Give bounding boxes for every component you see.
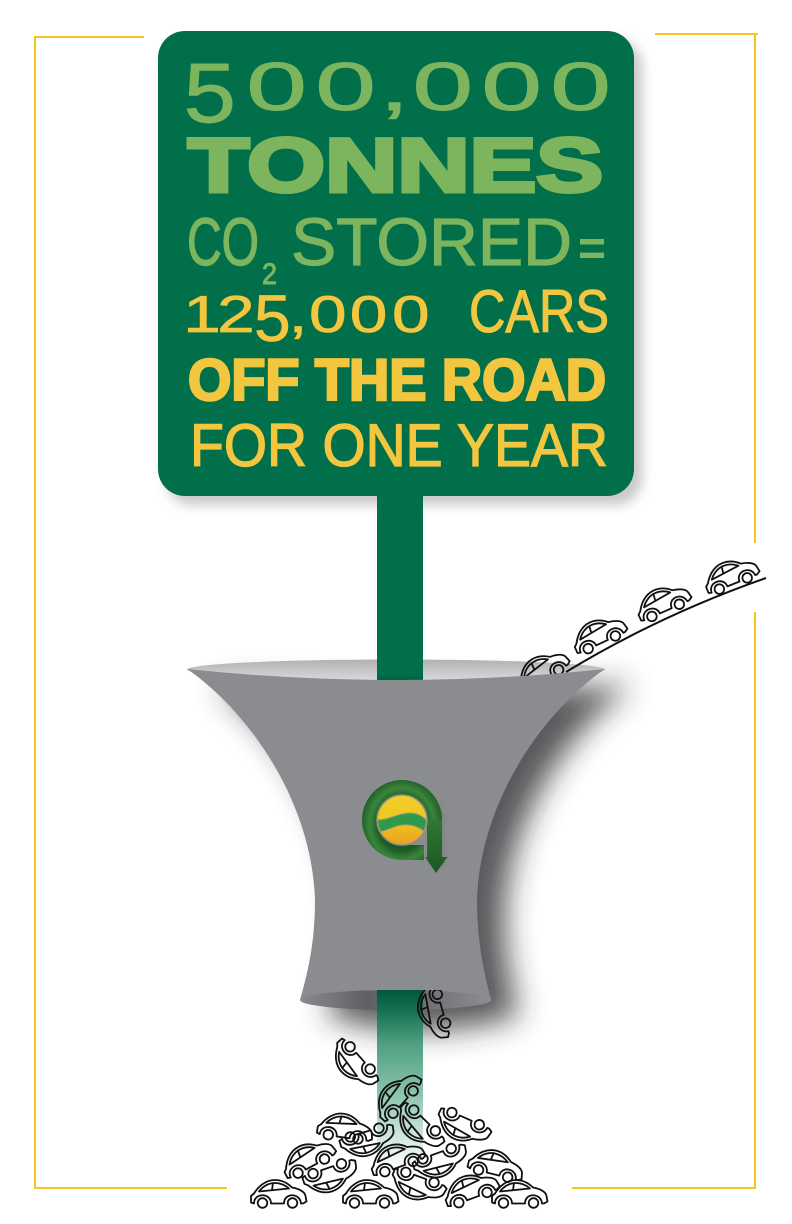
- bottom car centre: [343, 1180, 398, 1208]
- pile car: [466, 1145, 527, 1185]
- line: 125,000 CARS: CARS: [469, 278, 609, 345]
- logo shadow: [372, 791, 438, 866]
- pile car: [301, 1155, 362, 1199]
- sign post inside funnel: [377, 650, 423, 680]
- line: CO2 STORED=: STORED: [291, 205, 572, 280]
- pile car: [432, 1103, 494, 1151]
- falling cars and pile: [251, 1035, 548, 1211]
- sign shadow: [166, 40, 642, 505]
- car 1 on road: [700, 551, 762, 598]
- bottom car left: [251, 1180, 306, 1208]
- bottom car right: [492, 1180, 548, 1208]
- funnel bottom opening: [300, 990, 491, 1010]
- funnel top opening: [187, 660, 605, 680]
- line: 125,000 CARS: 5: [254, 281, 291, 355]
- funnel body: [187, 669, 605, 1000]
- funnel shadow: [215, 685, 633, 1030]
- line: CO2 STORED=: 2: [262, 258, 277, 291]
- line: OFF THE ROAD: OFF THE ROAD: [188, 348, 606, 413]
- pile car: [366, 1135, 428, 1180]
- line: CO2 STORED=: CO: [187, 205, 259, 280]
- car falling through funnel: [417, 990, 452, 1039]
- line: TONNES: TONNES: [188, 124, 603, 208]
- cars entering on road: [511, 551, 762, 696]
- falling car centre: [368, 1065, 426, 1125]
- logo arrow: [425, 820, 448, 873]
- pile car: [338, 1120, 399, 1162]
- sign post: [377, 490, 423, 680]
- car 2 on road: [632, 578, 694, 626]
- line: 125,000 CARS: [183, 278, 609, 355]
- logo globe: [376, 795, 428, 845]
- pile car: [316, 1110, 375, 1146]
- line: 125,000 CARS: ,000: [289, 285, 430, 343]
- sign panel: [158, 31, 634, 496]
- pile car: [277, 1132, 339, 1183]
- line: 125,000 CARS: 12: [183, 285, 255, 343]
- logo ring: [370, 788, 434, 860]
- line: 500,000: 00,000: [246, 49, 611, 125]
- pile car: [411, 1139, 472, 1184]
- line: 500,000: 5: [184, 46, 236, 140]
- line: FOR ONE YEAR: FOR ONE YEAR: [190, 412, 608, 479]
- line: CO2 STORED=: [187, 205, 606, 291]
- falling car left: [325, 1035, 383, 1095]
- logo: [370, 788, 448, 873]
- road: [566, 578, 766, 672]
- pile car: [387, 1164, 449, 1209]
- green beam: [377, 990, 423, 1168]
- pile car: [440, 1166, 502, 1211]
- line: 500,000: [184, 46, 611, 140]
- sign post below panel: [377, 495, 423, 505]
- car 3 on road: [568, 609, 630, 658]
- line: CO2 STORED=: =: [578, 220, 606, 276]
- car 4 entering funnel: [511, 643, 573, 696]
- pile car: [390, 1099, 449, 1157]
